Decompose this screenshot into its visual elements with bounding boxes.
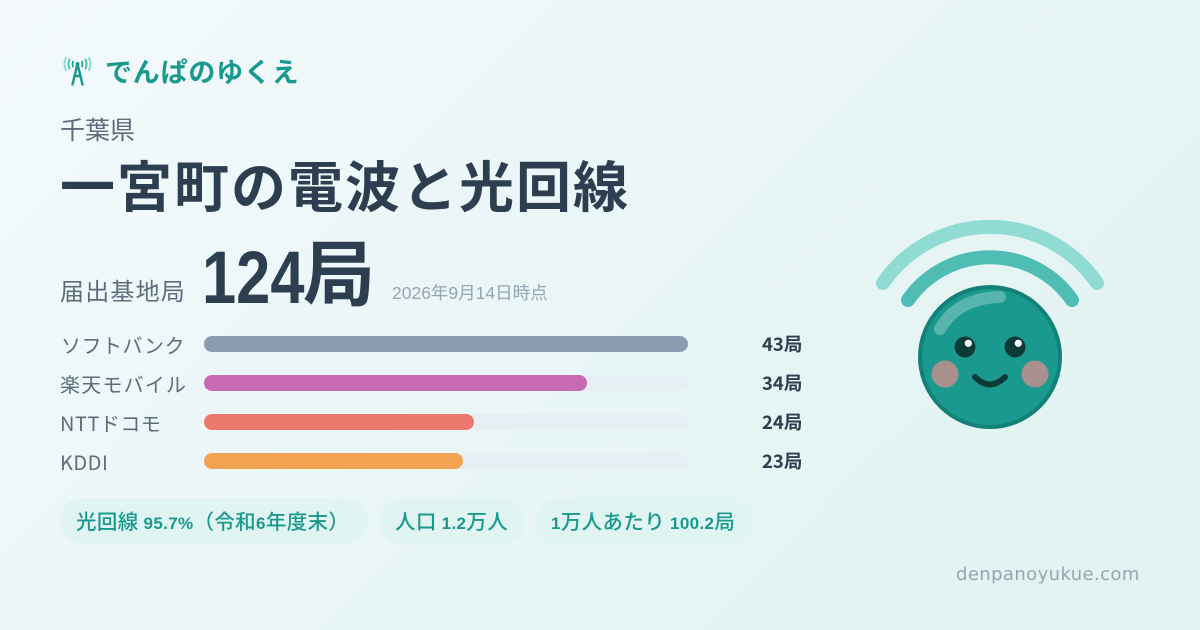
label: station count: 届出基地局 [60,272,186,307]
bar row: Rakuten Mobile: 34局 [762,370,802,396]
bar row: SoftBank: ソフトバンク [61,330,185,359]
date note: 2026年9月14日時点 [392,283,548,303]
bar row: Rakuten Mobile [60,369,802,398]
bar row: NTT Docomo: 24局 [762,409,802,435]
bar row: SoftBank: 43局 [762,331,802,357]
cheeks [932,360,1048,388]
bar row: Rakuten Mobile: 楽天モバイル [60,369,187,398]
bar row: NTT Docomo: NTTドコモ [60,408,161,437]
pill: fiber coverage: 光回線 95.7%（令和6年度末） [76,505,349,535]
logo text: でんぱのゆくえ [105,51,300,90]
bar row: KDDI: KDDI [60,447,108,476]
outer signal arc [883,227,1097,283]
station count value: 局 [303,216,375,321]
bar row: KDDI: 23局 [762,448,802,474]
station count value: 124 [202,236,304,319]
highlight [940,297,1000,329]
inner signal arc [908,257,1072,300]
pill: population: 人口 1.2万人 [395,505,508,535]
title: 一宮町の電波と光回線 [60,143,630,223]
bar row: KDDI [60,447,802,476]
prefecture: 千葉県 [60,111,135,147]
pill: population [379,498,525,544]
bar row: SoftBank [61,330,802,359]
pill: stations per 10k people [535,498,752,544]
bar row: NTT Docomo [60,408,802,437]
pill: fiber coverage [60,498,368,544]
mascot face [920,287,1060,427]
pill: stations per 10k people: 1万人あたり 100.2局 [551,505,735,535]
logo: antenna icon [64,57,92,86]
site URL: denpanoyukue.com [956,564,1140,585]
eyes [954,336,1026,358]
station count value [202,216,375,321]
mascot with signal arcs [876,220,1104,429]
mouth [975,377,1005,384]
